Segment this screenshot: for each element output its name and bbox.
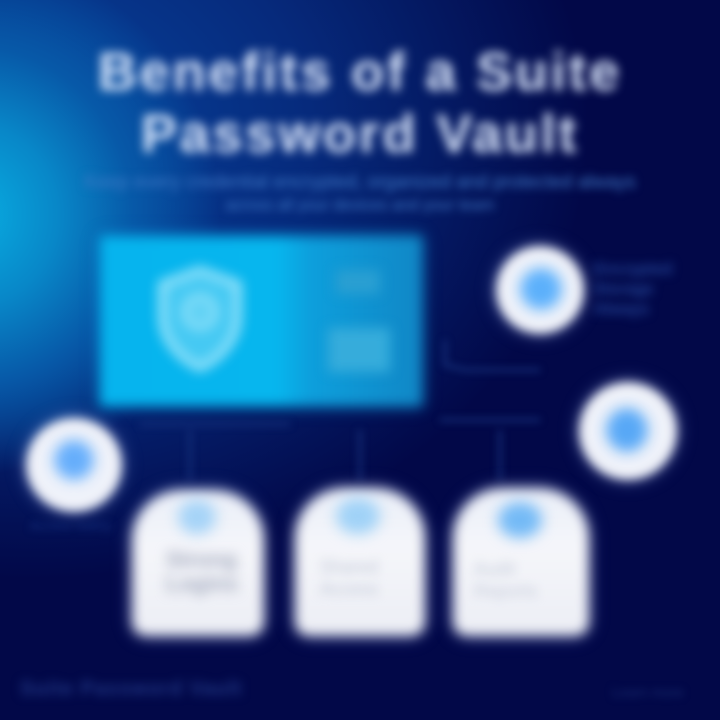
card body [295, 488, 425, 636]
icon centre [54, 440, 94, 480]
card text: Shared [320, 557, 378, 577]
card icon [498, 502, 542, 538]
card text: Strong [166, 547, 237, 572]
card text [162, 547, 241, 600]
row two [328, 328, 390, 372]
card: left [120, 478, 276, 648]
card icon [178, 500, 216, 534]
icon centre [520, 268, 562, 310]
icon disc [579, 382, 677, 480]
card text: Audit [474, 559, 515, 579]
row one [336, 270, 380, 294]
card text: Access [320, 579, 378, 599]
badge text [591, 260, 675, 320]
card: right [441, 476, 602, 648]
panel: vault screen [90, 226, 433, 418]
subtitle: across all your devices and your team [226, 197, 494, 214]
title [94, 42, 624, 164]
icon disc [496, 246, 584, 334]
badge: middle right [568, 371, 688, 491]
connector lines [187, 342, 540, 479]
subtitle: Keep every credential encrypted, organized and protected always [84, 172, 636, 193]
card text: Reports [474, 581, 537, 601]
card text [320, 557, 378, 599]
screen list rows [323, 267, 394, 377]
panel background [100, 236, 422, 406]
badge text: Storage [594, 281, 654, 298]
card icon [336, 498, 380, 534]
footer link text: Learn more [612, 684, 684, 700]
icon: shield [150, 258, 250, 379]
card text [474, 559, 537, 601]
title: Benefits of a Suite [98, 42, 622, 102]
badge text: Always [594, 301, 649, 318]
card body [132, 490, 264, 636]
card: middle [282, 476, 438, 648]
badge: top right [485, 235, 675, 345]
badge text: Encrypted [594, 261, 672, 278]
icon disc [26, 418, 122, 512]
card text: Logins [166, 571, 238, 596]
title: Password Vault [141, 104, 579, 164]
card body [453, 488, 589, 636]
footer logo text: Suite Password Vault [20, 678, 242, 700]
subtitle [84, 172, 638, 214]
icon centre [606, 408, 648, 452]
badge: left [16, 408, 132, 533]
badge caption: Access Safely [30, 518, 112, 533]
